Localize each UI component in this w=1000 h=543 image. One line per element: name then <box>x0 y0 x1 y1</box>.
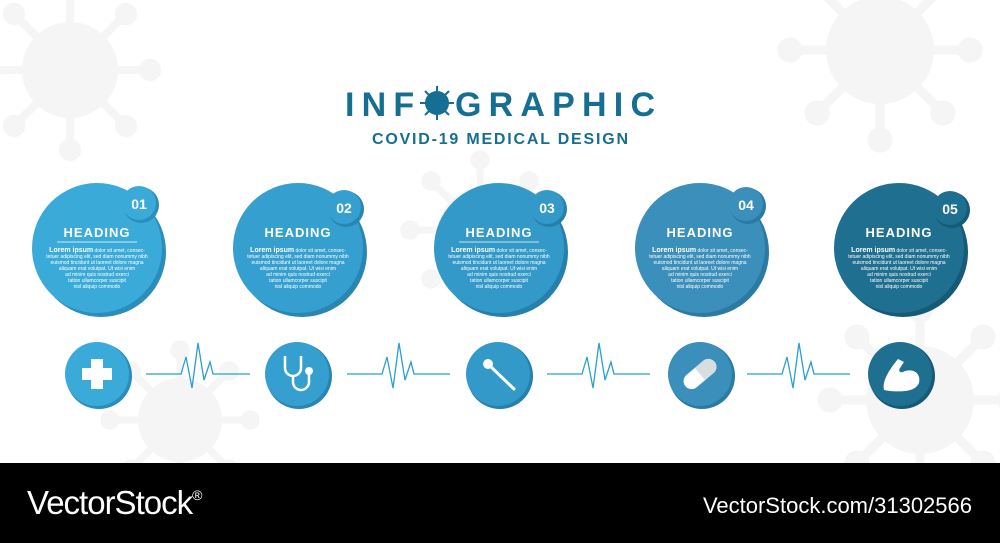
panel 04: HEADING <box>667 225 733 240</box>
panel 03: euismod tincidunt ut laoreet dolore magna <box>452 260 546 266</box>
footer bar: VectorStock <box>27 484 192 521</box>
panel 05: nisl aliquip commodo <box>876 284 923 290</box>
panel 03: nisl aliquip commodo <box>476 284 523 290</box>
panel 05: ad minim quis nostrud exerci <box>867 272 931 278</box>
panel 02 <box>233 183 367 317</box>
panel 03 <box>434 183 568 317</box>
icon: stethoscope <box>265 342 332 409</box>
panel 02: 02 <box>336 200 352 216</box>
title: INFOGRAPHIC <box>345 86 655 124</box>
panel 04: aliquam erat volutpat. Ut wisi enim <box>662 266 738 272</box>
icon: virus in title <box>420 86 454 120</box>
footer bar: ® <box>192 487 203 503</box>
panel 02: nisl aliquip commodo <box>275 284 322 290</box>
panel 04: ad minim quis nostrud exerci <box>668 272 732 278</box>
panel 01: HEADING <box>64 225 130 240</box>
title <box>345 86 655 148</box>
panel 01: tation ullamcorper suscipit <box>68 278 127 284</box>
panel 02: HEADING <box>265 225 331 240</box>
panel 01: aliquam erat volutpat. Ut wisi enim <box>59 266 135 272</box>
panel 03: aliquam erat volutpat. Ut wisi enim <box>461 266 537 272</box>
panel 05: 05 <box>942 201 958 217</box>
panel 05: Lorem ipsum dolor sit amet, consec- <box>851 247 947 254</box>
panel 03: Lorem ipsum dolor sit amet, consec- <box>451 247 547 254</box>
panel 04 <box>635 183 769 317</box>
panel 05: tetuer adipiscing elit, sed diam nonummy nibh <box>848 254 950 260</box>
panel 02: ad minim quis nostrud exerci <box>266 272 330 278</box>
subtitle: COVID-19 MEDICAL DESIGN <box>372 131 628 148</box>
panel 01: euismod tincidunt ut laoreet dolore magna <box>50 260 144 266</box>
panel 03: ad minim quis nostrud exerci <box>467 272 531 278</box>
icon: muscle <box>868 342 935 409</box>
panel 04: tation ullamcorper suscipit <box>671 278 730 284</box>
panel 05: euismod tincidunt ut laoreet dolore magna <box>852 260 946 266</box>
panel 01: 01 <box>131 196 147 212</box>
panel 02: tetuer adipiscing elit, sed diam nonummy nibh <box>247 254 349 260</box>
panel 03: tation ullamcorper suscipit <box>470 278 529 284</box>
panel 03: tetuer adipiscing elit, sed diam nonummy nibh <box>448 254 550 260</box>
panel 01: Lorem ipsum dolor sit amet, consec- <box>49 247 145 254</box>
panel 01 <box>32 183 166 317</box>
icon: thermometer <box>466 342 533 409</box>
icon: pill <box>668 342 735 409</box>
panel 05: aliquam erat volutpat. Ut wisi enim <box>861 266 937 272</box>
panel 04: 04 <box>738 197 754 213</box>
footer bar: VectorStock.com/31302566 <box>703 493 972 518</box>
footer bar <box>0 463 1000 543</box>
panel 05: HEADING <box>866 225 932 240</box>
panel 03: 03 <box>539 200 555 216</box>
panel 02: euismod tincidunt ut laoreet dolore magna <box>251 260 345 266</box>
panel 02: aliquam erat volutpat. Ut wisi enim <box>260 266 336 272</box>
heartbeat lines <box>146 343 850 388</box>
panel 01: nisl aliquip commodo <box>74 284 121 290</box>
panel 02: tation ullamcorper suscipit <box>269 278 328 284</box>
panel 04: tetuer adipiscing elit, sed diam nonummy nibh <box>649 254 751 260</box>
icon: cross <box>65 342 132 409</box>
panel 04: Lorem ipsum dolor sit amet, consec- <box>652 247 748 254</box>
panel 02: Lorem ipsum dolor sit amet, consec- <box>250 247 346 254</box>
panel 05 <box>834 183 970 317</box>
panel 01: ad minim quis nostrud exerci <box>65 272 129 278</box>
panel 04: euismod tincidunt ut laoreet dolore magna <box>653 260 747 266</box>
panel 01: tetuer adipiscing elit, sed diam nonummy nibh <box>46 254 148 260</box>
panel 05: tation ullamcorper suscipit <box>870 278 929 284</box>
panel 04: nisl aliquip commodo <box>677 284 724 290</box>
panel 03: HEADING <box>466 225 532 240</box>
